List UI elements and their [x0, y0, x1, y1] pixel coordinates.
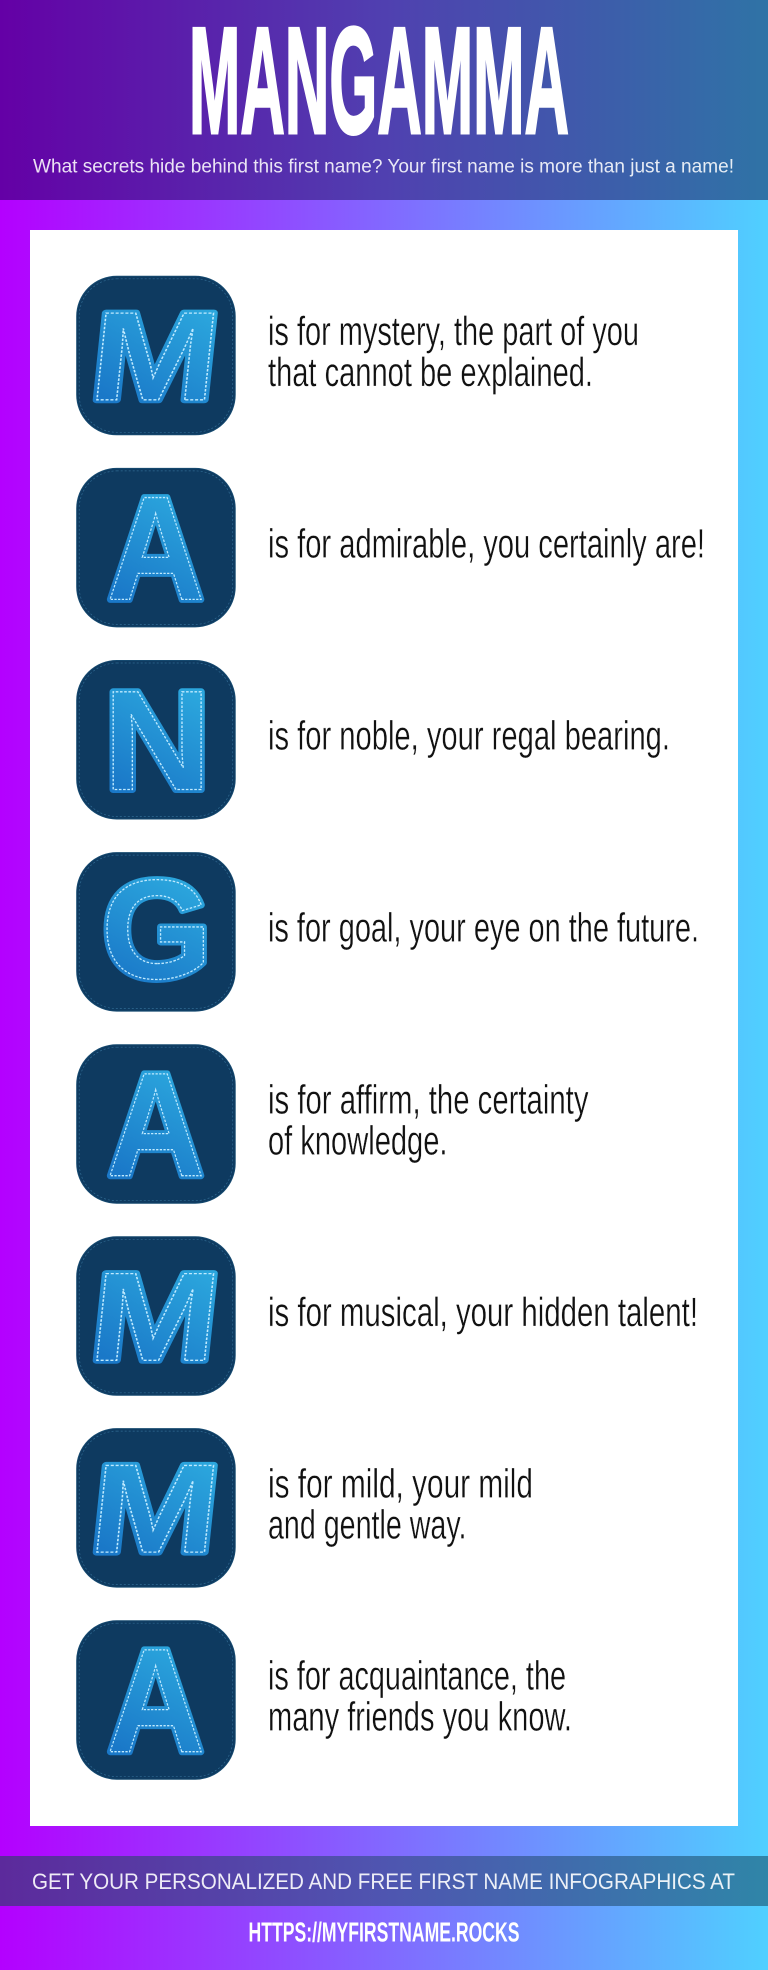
icon: letter G: G	[101, 850, 212, 1008]
text: A line: of knowledge.	[268, 1118, 448, 1164]
icon: letter M: M	[84, 1438, 227, 1579]
icon: letter M: M	[84, 286, 227, 427]
row: A affirm	[77, 1043, 589, 1208]
header banner	[0, 0, 768, 200]
icon: letter A: A	[107, 466, 205, 631]
icon: letter G	[77, 850, 235, 1011]
row: M mystery	[77, 276, 639, 435]
text: M line: is for mild, your mild	[268, 1460, 533, 1506]
icon: letter A: A	[107, 1043, 205, 1208]
icon: letter A	[77, 1043, 235, 1208]
icon: letter N	[77, 660, 235, 820]
icon: letter M: M	[84, 1247, 227, 1387]
text: A line: many friends you know.	[268, 1694, 572, 1740]
footer band	[0, 1856, 768, 1906]
icon: letter A: A	[107, 1043, 205, 1208]
text: A line: is for affirm, the certainty	[268, 1076, 589, 1122]
icon: letter A: A	[107, 466, 205, 631]
icon: letter N: N	[103, 662, 211, 820]
row: A acquaintance	[77, 1619, 572, 1784]
white panel: letter meanings	[30, 230, 738, 1826]
footer call to action: GET YOUR PERSONALIZED AND FREE FIRST NAME INFOGRAPHICS AT	[32, 1869, 735, 1894]
icon: letter G: G	[101, 850, 212, 1008]
row: M musical	[77, 1237, 698, 1395]
text: M line: that cannot be explained.	[268, 349, 593, 395]
icon: letter N: N	[103, 662, 211, 820]
icon: letter A	[77, 466, 235, 631]
footer URL: HTTPS://MYFIRSTNAME.ROCKS	[248, 1916, 520, 1948]
icon: letter M: M	[84, 1247, 227, 1387]
icon: letter A: A	[107, 1619, 205, 1784]
row: M mild	[77, 1429, 533, 1587]
text: M line: and gentle way.	[268, 1501, 466, 1547]
icon: letter A: A	[107, 1619, 205, 1784]
icon: letter A	[77, 1619, 235, 1784]
row: A admirable	[77, 466, 705, 631]
text: A line: is for acquaintance, the	[268, 1652, 566, 1698]
icon: letter M	[77, 276, 235, 435]
subtitle: What secrets hide behind this first name? Your first name is more than just a name!	[33, 156, 734, 178]
icon: letter M	[77, 1429, 235, 1587]
row: N noble	[77, 660, 670, 820]
icon: letter M: M	[84, 1438, 227, 1579]
icon: letter M	[77, 1237, 235, 1395]
icon: letter M: M	[84, 286, 227, 427]
row: G goal	[77, 850, 699, 1011]
